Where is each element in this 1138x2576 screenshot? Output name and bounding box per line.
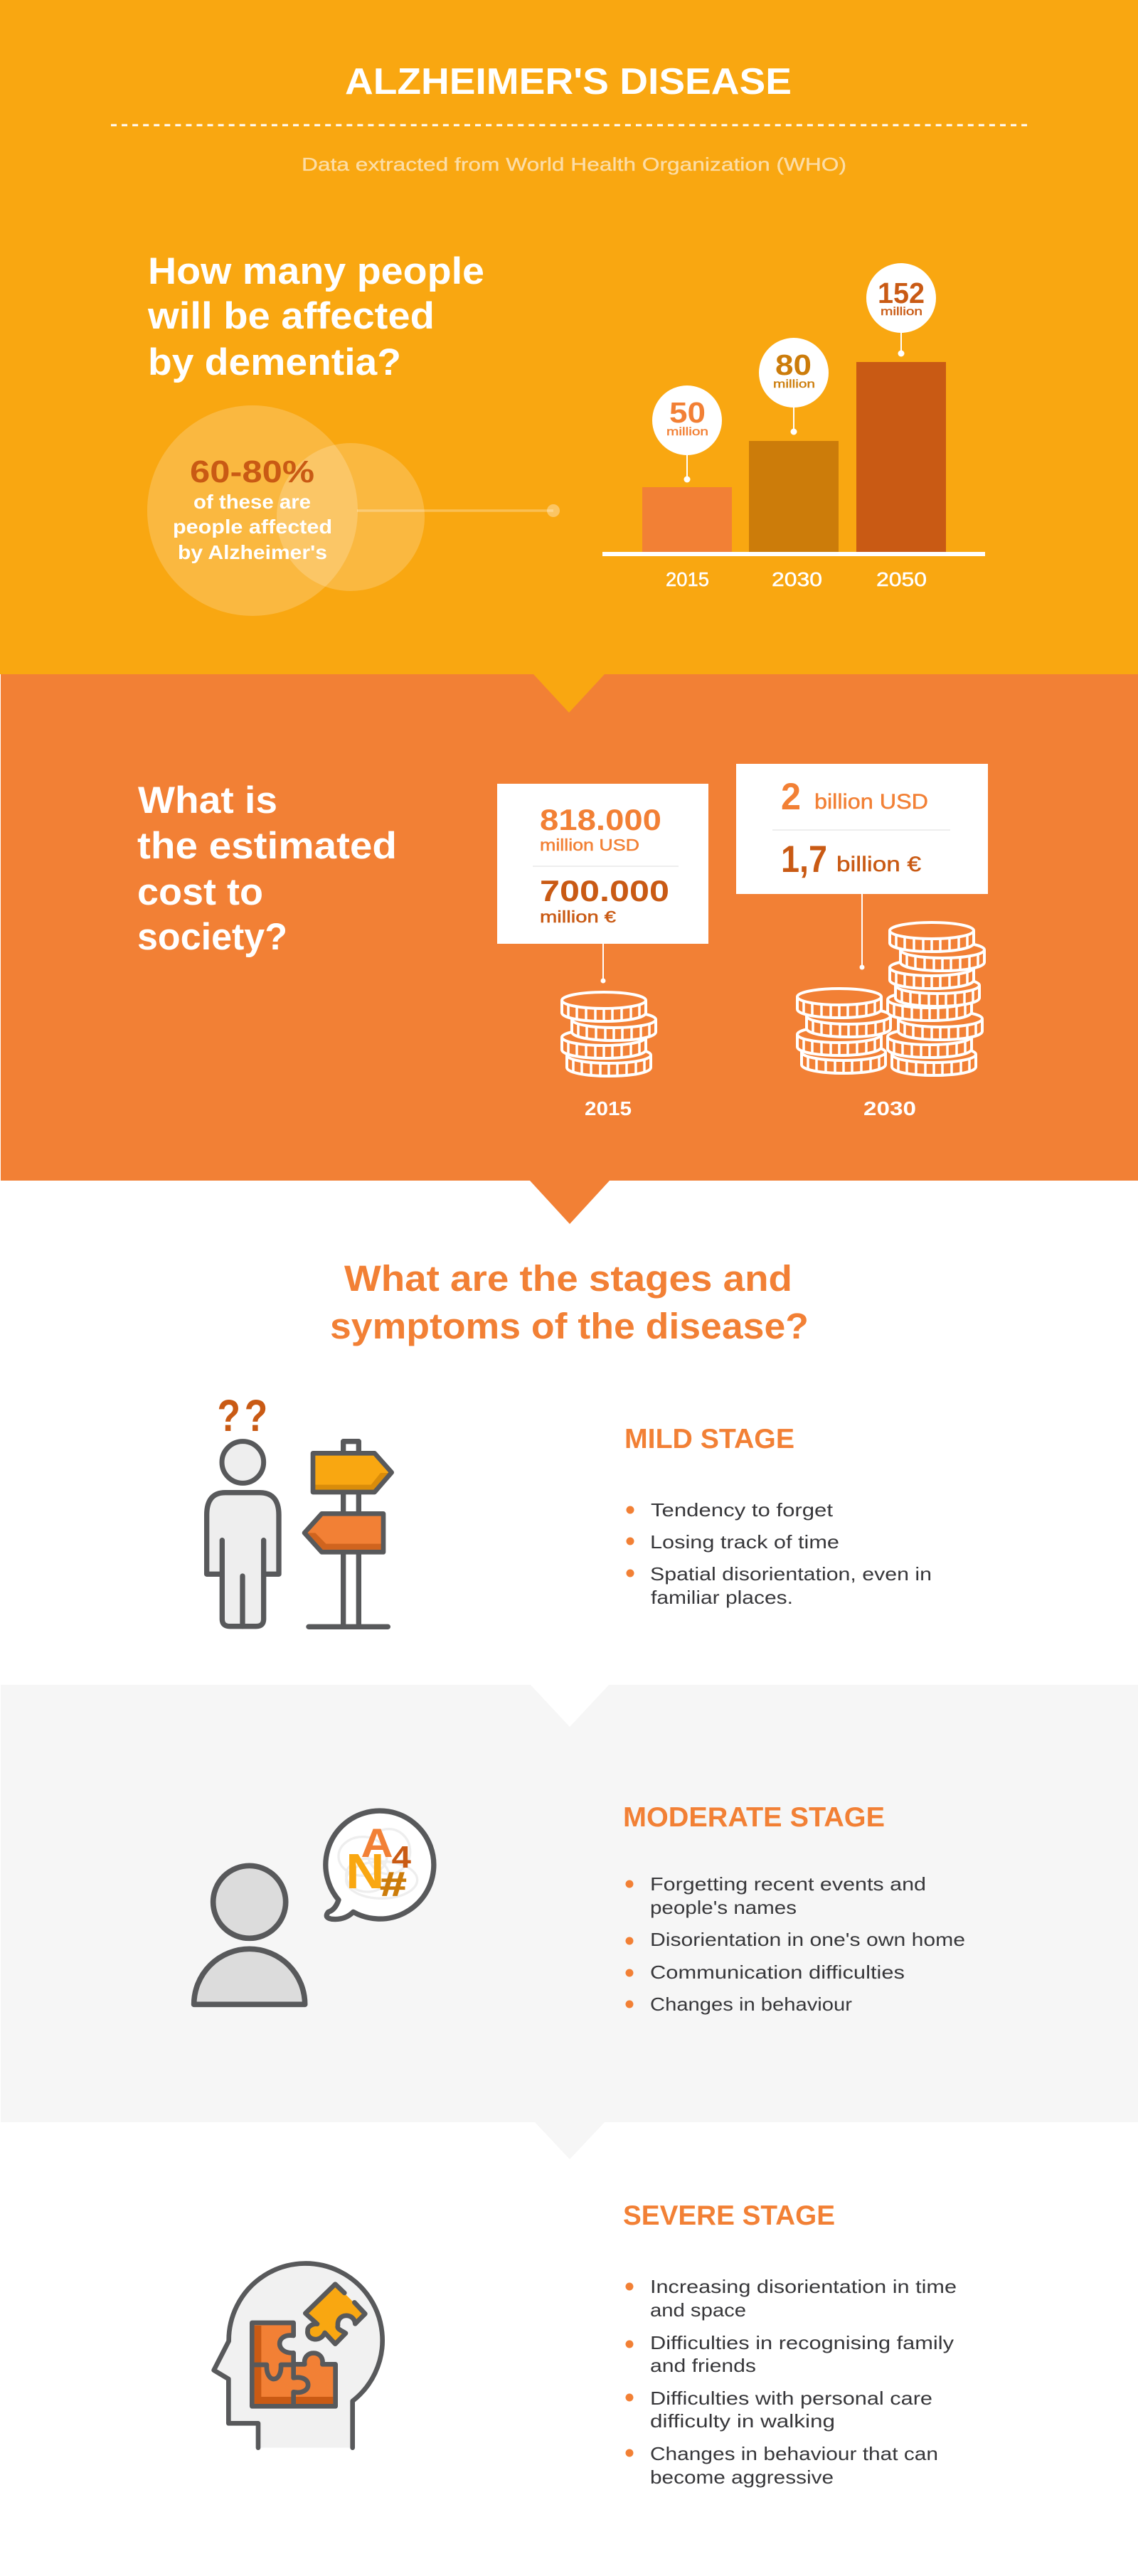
- symptom list: severe: [626, 2276, 957, 2488]
- symptom list: severe: difficulty in walking: [650, 2410, 835, 2432]
- venn circles callout: by Alzheimer's: [178, 541, 327, 563]
- panel: moderate stage: [1, 1684, 1138, 2159]
- symptom list: severe: and friends: [650, 2355, 756, 2376]
- icon: person with jumbled speech bubble: A: [361, 1821, 393, 1866]
- heading: how many people: [147, 250, 484, 383]
- stage title: moderate: MODERATE STAGE: [623, 1802, 885, 1833]
- bar chart: [602, 263, 985, 590]
- heading: estimated cost: the estimated: [137, 825, 397, 867]
- symptom list: severe: and space: [650, 2299, 746, 2321]
- symptom list: moderate: Changes in behaviour: [650, 1994, 852, 2015]
- venn circles callout: people affected: [173, 516, 332, 538]
- bubble: 50 million: [652, 385, 722, 482]
- bubble: 80 million: [759, 338, 829, 435]
- symptom list: mild: Tendency to forget: [651, 1499, 834, 1521]
- icon: confused person at signpost: [207, 1391, 392, 1627]
- bubble: 50 million: million: [666, 426, 708, 438]
- symptom list: severe: become aggressive: [650, 2466, 834, 2488]
- panel: cost to society: [1, 674, 1138, 1224]
- panel: mild stage: [207, 1391, 932, 1627]
- bubble: 80 million: 80: [775, 348, 812, 381]
- symptom list: moderate: Forgetting recent events and: [650, 1873, 926, 1895]
- stage title: mild: MILD STAGE: [624, 1424, 794, 1454]
- bubble: 152 million: 152: [878, 277, 925, 309]
- cost box 2030: billion €: [836, 853, 921, 876]
- cost box 2030: 2: [781, 776, 801, 818]
- subtitle: Data extracted from World Health Organization (WHO): [302, 154, 846, 175]
- bar chart: 2030: [772, 568, 822, 590]
- icon: person with jumbled speech bubble: [194, 1811, 434, 2004]
- cost box 2015: [497, 784, 708, 983]
- cost box 2030: 1,7: [781, 839, 827, 880]
- symptom list: moderate: [626, 1873, 965, 2015]
- bubble: 152 million: [866, 263, 936, 357]
- icon: person with jumbled speech bubble: N: [346, 1843, 385, 1899]
- symptom list: severe: Changes in behaviour that can: [650, 2443, 938, 2464]
- heading: how many people: will be affected: [147, 295, 435, 337]
- heading: estimated cost: society?: [137, 916, 287, 958]
- panel: severe stage: [214, 2200, 957, 2488]
- bar chart: 2015: [666, 568, 709, 590]
- symptom list: moderate: people's names: [650, 1897, 797, 1918]
- year label 2015: 2015: [585, 1097, 632, 1119]
- symptom list: severe: Difficulties in recognising family: [650, 2332, 954, 2353]
- cost box 2030: billion USD: [814, 790, 928, 814]
- bubble: 152 million: million: [881, 306, 922, 318]
- heading: estimated cost: [137, 779, 397, 958]
- heading: stages and symptoms: [330, 1258, 809, 1346]
- symptom list: mild: Spatial disorientation, even in: [650, 1563, 932, 1585]
- icon: confused person at signpost: ?: [217, 1391, 240, 1441]
- heading: how many people: by dementia?: [148, 341, 401, 383]
- cost box 2015: million USD: [540, 836, 639, 854]
- title: ALZHEIMER'S DISEASE: [345, 61, 792, 102]
- icon: person with jumbled speech bubble: 4: [392, 1840, 412, 1875]
- heading: stages and symptoms: What are the stages and: [344, 1258, 792, 1299]
- symptom list: moderate: Communication difficulties: [650, 1962, 905, 1983]
- icon: coin stacks 2030: [797, 922, 984, 1075]
- symptom list: moderate: Disorientation in one's own home: [650, 1929, 965, 1950]
- cost box 2030: [736, 764, 988, 970]
- cost box 2015: million €: [540, 908, 616, 926]
- symptom list: severe: Increasing disorientation in time: [650, 2276, 957, 2297]
- bubble: 50 million: 50: [669, 396, 706, 429]
- heading: how many people: How many people: [148, 250, 484, 292]
- bar chart: 2050: [876, 568, 927, 590]
- icon: person with jumbled speech bubble: #: [381, 1866, 406, 1904]
- venn circles callout: of these are: [193, 491, 311, 513]
- year label 2030: 2030: [863, 1097, 916, 1119]
- bubble: 80 million: million: [773, 378, 815, 390]
- symptom list: mild: [626, 1499, 932, 1608]
- symptom list: mild: Losing track of time: [650, 1531, 839, 1553]
- venn circles callout: 60-80%: [190, 454, 314, 489]
- cost box 2015: 700.000: [540, 874, 669, 908]
- stage title: severe: SEVERE STAGE: [623, 2200, 835, 2231]
- icon: head with puzzle pieces: [214, 2264, 383, 2448]
- symptom list: mild: familiar places.: [651, 1587, 793, 1608]
- panel: dementia prevalence: [0, 0, 1138, 674]
- heading: estimated cost: What is: [138, 779, 277, 821]
- icon: coin stack 2015: [562, 992, 656, 1076]
- heading: estimated cost: cost to: [137, 871, 263, 913]
- icon: confused person at signpost: ?: [245, 1391, 267, 1441]
- heading: stages and symptoms: symptoms of the disease?: [330, 1306, 809, 1346]
- venn circles callout: [147, 405, 560, 616]
- symptom list: severe: Difficulties with personal care: [650, 2388, 932, 2409]
- cost box 2015: 818.000: [540, 803, 661, 836]
